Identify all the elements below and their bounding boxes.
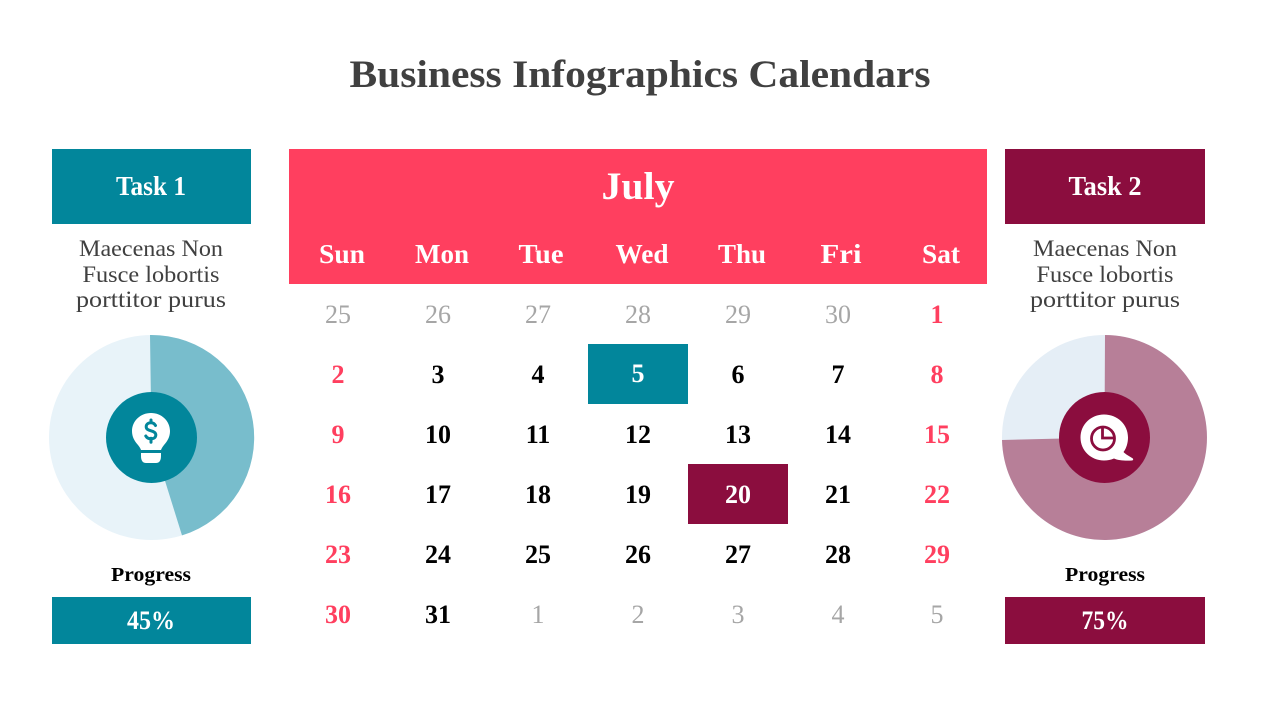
task 2 header (1005, 149, 1205, 224)
calendar dates: 26 (625, 540, 651, 569)
panel: task 2 (1002, 149, 1207, 644)
pie chart: 75% (1002, 335, 1207, 540)
calendar dates: 25 (325, 300, 351, 329)
calendar dates: 28 (625, 300, 651, 329)
calendar dates: 30 (825, 300, 851, 329)
calendar dates: 8 (930, 360, 944, 389)
calendar dates: 2 (332, 360, 344, 389)
calendar dates: 29 (924, 540, 950, 569)
task 1 description (76, 236, 226, 312)
weekday labels: Sat (922, 239, 960, 269)
calendar dates: 15 (924, 420, 950, 449)
calendar dates: 12 (625, 420, 651, 449)
icon: light bulb with dollar (132, 413, 170, 463)
calendar dates: 4 (832, 600, 844, 629)
task 2 description: porttitor purus (1030, 287, 1180, 312)
calendar dates: 2 (632, 600, 644, 629)
calendar dates: 24 (425, 540, 451, 569)
calendar dates: 27 (525, 300, 551, 329)
panel: calendar (289, 149, 987, 629)
calendar dates: 5 (930, 600, 944, 629)
highlight: July 5 (588, 344, 688, 404)
calendar dates: 26 (425, 300, 451, 329)
calendar dates: 3 (432, 360, 444, 389)
weekday labels: Thu (718, 239, 766, 269)
calendar dates: 23 (325, 540, 351, 569)
weekday labels: Mon (415, 239, 469, 269)
calendar dates: 10 (425, 420, 451, 449)
weekday labels: Tue (518, 239, 564, 269)
progress value: 45% (52, 597, 251, 644)
calendar dates: 18 (525, 480, 551, 509)
progress value: 75%: 75% (1082, 606, 1128, 635)
weekday labels: Fri (820, 239, 862, 269)
task 1 header: Task 1 (116, 171, 186, 201)
calendar dates: 21 (825, 480, 851, 509)
task 1 description: Maecenas Non (79, 236, 224, 261)
icon: chat bubble with pie clock (1080, 414, 1133, 461)
calendar dates: 17 (425, 480, 451, 509)
calendar dates: 29 (725, 300, 751, 329)
task 2 description (1030, 236, 1180, 312)
calendar dates: 6 (732, 360, 744, 389)
task 2 description: Maecenas Non (1033, 236, 1178, 261)
progress label: Progress (1065, 564, 1145, 586)
weekday labels: Wed (616, 239, 668, 269)
calendar dates: 27 (725, 540, 751, 569)
calendar dates: 1 (930, 300, 944, 329)
pie chart: 45% (49, 335, 254, 540)
task 2 description: Fusce lobortis (1036, 262, 1174, 287)
calendar dates: 25 (525, 540, 551, 569)
calendar dates: 31 (425, 600, 451, 629)
weekday labels (319, 239, 960, 269)
month: July (602, 165, 675, 208)
calendar dates: 1 (532, 600, 544, 629)
calendar dates: 7 (832, 360, 844, 389)
progress value: 75% (1005, 597, 1205, 644)
calendar dates: 30 (325, 600, 351, 629)
task 1 description: Fusce lobortis (82, 262, 220, 287)
calendar dates: 22 (924, 480, 950, 509)
calendar dates: 4 (532, 360, 544, 389)
calendar header (289, 149, 987, 284)
highlight: July 20 (688, 464, 788, 524)
calendar dates: 19 (625, 480, 651, 509)
calendar dates: 28 (825, 540, 851, 569)
calendar dates: 11 (526, 420, 550, 449)
calendar dates: 14 (825, 420, 851, 449)
progress label: Progress (111, 564, 191, 586)
calendar dates: 16 (325, 480, 351, 509)
task 1 description: porttitor purus (76, 287, 226, 312)
task 2 header: Task 2 (1068, 171, 1142, 201)
task 1 header (52, 149, 251, 224)
calendar dates: 3 (732, 600, 744, 629)
panel: task 1 (49, 149, 254, 644)
calendar dates: 9 (332, 420, 344, 449)
calendar dates: 13 (725, 420, 751, 449)
title: Business Infographics Calendars (350, 53, 930, 96)
calendar dates: 20 (725, 480, 751, 509)
calendar dates (325, 300, 950, 629)
calendar dates: 5 (632, 359, 644, 388)
weekday labels: Sun (319, 239, 365, 269)
progress value: 45%: 45% (127, 606, 175, 635)
